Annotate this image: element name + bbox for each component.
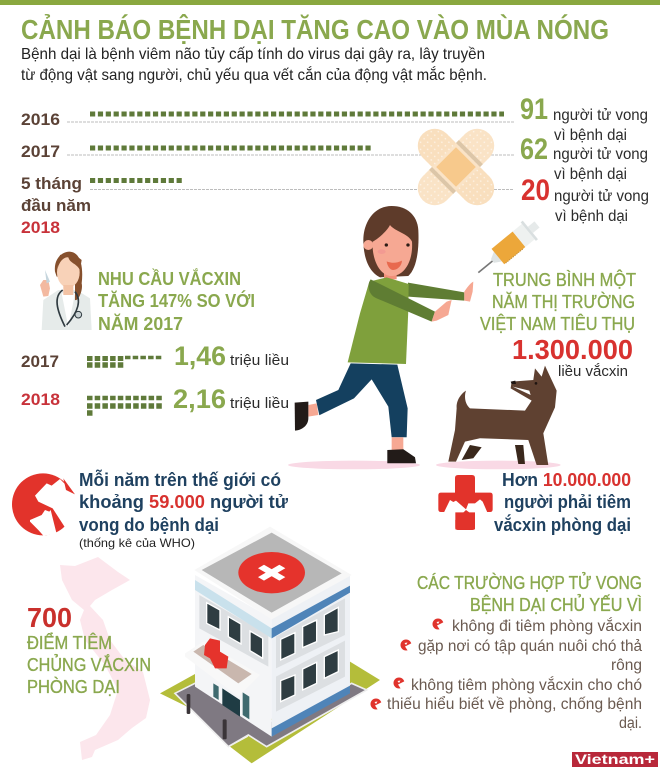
wall recesses <box>199 595 345 712</box>
icon: red circle with dog and human <box>12 473 78 536</box>
right arm <box>408 283 464 301</box>
cause 2: gặp nơi có tập quán nuôi chó thả <box>418 638 642 655</box>
vaccination statistic text: Hơn 10.000.000 <box>502 470 631 490</box>
legs and shoes <box>308 403 318 417</box>
icon: red cross with animals <box>438 475 493 530</box>
doses label: liều vắcxin <box>558 363 628 380</box>
map of Vietnam <box>60 557 150 760</box>
vaccine demand heading: TĂNG 147% SO VỚI <box>98 290 255 311</box>
shirt <box>348 277 409 364</box>
count 91: người tử vong <box>553 107 648 124</box>
illustration: hospital <box>160 527 380 763</box>
cause 4 <box>370 696 642 732</box>
world statistic text: (thống kê của WHO) <box>79 536 195 550</box>
year labels: 2018 <box>21 219 60 237</box>
cause 4: thiếu hiểu biết về phòng, chống bệnh <box>387 696 642 713</box>
year labels: 2017 <box>21 143 60 161</box>
left wall <box>195 575 272 737</box>
illustration: woman <box>288 206 473 469</box>
count 62: người tử vong <box>553 146 648 163</box>
vaccination points text: PHÒNG DẠI <box>27 676 120 697</box>
world statistic text <box>79 469 289 550</box>
neck <box>384 272 397 279</box>
vaccination statistic text <box>494 470 631 535</box>
guide lines <box>67 122 514 190</box>
market consumption text: VIỆT NAM TIÊU THỤ <box>480 314 635 334</box>
market consumption text: TRUNG BÌNH MỘT <box>493 269 636 290</box>
vaccine demand heading: NĂM 2017 <box>98 313 183 334</box>
hair <box>363 206 419 277</box>
illustration: syringe <box>471 215 545 282</box>
windows <box>207 603 338 702</box>
count 62 <box>520 133 648 183</box>
year labels: 5 tháng <box>21 175 82 193</box>
vaccination statistic text: người phải tiêm <box>504 492 631 512</box>
count 20: người tử vong <box>554 188 649 205</box>
vaccination points text: ĐIỂM TIÊM <box>27 632 112 653</box>
count 20: 20 <box>521 174 550 207</box>
face <box>373 225 412 276</box>
count 62: 62 <box>520 133 548 166</box>
count 20: vì bệnh dại <box>555 208 628 225</box>
icon: doctor <box>40 252 92 330</box>
left arm <box>369 279 435 322</box>
market consumption text <box>480 269 636 380</box>
logo: Vietnam+: Vietnam+ <box>575 751 655 767</box>
year labels: đầu năm <box>21 197 91 215</box>
entrance canopy <box>185 642 260 697</box>
intro text <box>21 46 487 84</box>
right wall <box>272 575 350 737</box>
chart: deaths per year <box>21 111 514 237</box>
ground shadow <box>288 461 420 469</box>
cause 2: rông <box>611 657 642 674</box>
cause 2 <box>400 638 642 674</box>
intro text: Bệnh dại là bệnh viêm não tủy cấp tính do virus dại gây ra, lây truyền <box>21 46 485 63</box>
cause 3: không tiêm phòng vắcxin cho chó <box>411 677 642 694</box>
bars <box>90 114 504 180</box>
row 2017: 2017 <box>21 353 59 371</box>
bollards <box>187 694 190 714</box>
trousers <box>316 363 408 437</box>
illustration: dog <box>436 366 561 469</box>
vaccination statistic text: vắcxin phòng dại <box>494 514 631 535</box>
count 20 <box>521 174 649 225</box>
count 91: 91 <box>520 93 548 126</box>
cause 4: dại. <box>619 715 642 732</box>
world statistic text: vong do bệnh dại <box>79 515 219 535</box>
world statistic text: khoảng 59.000 người tử <box>79 492 289 512</box>
roof <box>194 527 352 619</box>
vaccination points text: 700 <box>27 602 72 633</box>
year labels <box>21 111 91 237</box>
row 2018: triệu liều <box>230 396 289 412</box>
door <box>222 688 240 717</box>
vaccination points text: CHỦNG VẮCXIN <box>27 654 151 675</box>
row 2018: 2,16 <box>173 384 226 414</box>
causes heading <box>417 572 642 615</box>
market consumption text: NĂM THỊ TRƯỜNG <box>492 291 635 312</box>
count 91 <box>520 93 648 144</box>
icon: crossed bandages <box>411 122 501 212</box>
count 62: vì bệnh dại <box>554 166 627 183</box>
row 2018: 2018 <box>21 391 60 409</box>
causes list <box>370 618 642 732</box>
row 2017 <box>21 341 289 371</box>
red roof mark <box>238 552 305 593</box>
vaccine doses chart <box>21 341 289 414</box>
vaccination points text <box>27 602 151 697</box>
vaccine demand heading: NHU CẦU VẮCXIN <box>98 268 241 289</box>
death counts <box>520 93 649 225</box>
cause 1: không đi tiêm phòng vắcxin <box>452 618 642 635</box>
facade stripes <box>195 580 272 638</box>
causes heading: BỆNH DẠI CHỦ YẾU VÌ <box>470 594 642 615</box>
figure 1.300.000: 1.300.000 <box>512 334 633 365</box>
top bar <box>0 0 660 5</box>
row 2017: triệu liều <box>230 353 289 369</box>
year labels: 2016 <box>21 111 60 129</box>
intro text: từ động vật sang người, chủ yếu qua vết cắn của động vật mắc bệnh. <box>21 65 487 84</box>
count 91: vì bệnh dại <box>554 127 627 144</box>
ground <box>160 662 380 763</box>
row 2017: 1,46 <box>174 341 226 371</box>
row 2018 <box>21 384 289 414</box>
world statistic text: Mỗi năm trên thế giới có <box>79 469 281 490</box>
vaccine demand heading <box>98 268 255 334</box>
